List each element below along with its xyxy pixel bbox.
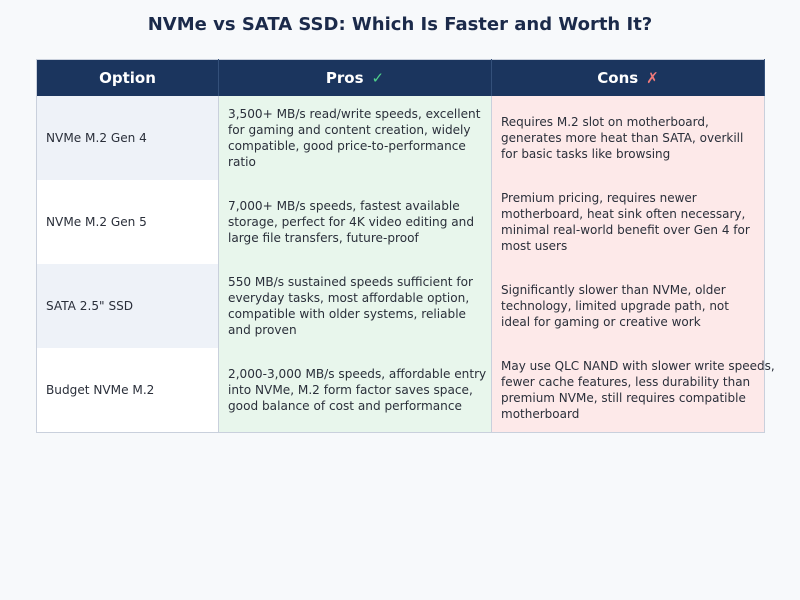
comparison table: 2,000-3,000 MB/s speeds, affordable entry — [228, 367, 486, 381]
comparison table: NVMe M.2 Gen 4 — [46, 131, 147, 145]
comparison table: ideal for gaming or creative work — [501, 315, 701, 329]
comparison table — [36, 59, 765, 432]
comparison table: technology, limited upgrade path, not — [501, 299, 729, 313]
comparison table: 550 MB/s sustained speeds sufficient for — [228, 275, 473, 289]
comparison table: Pros ✓ — [326, 69, 384, 87]
comparison table: fewer cache features, less durability than — [501, 375, 750, 389]
comparison table: Premium pricing, requires newer — [501, 191, 697, 205]
comparison table: Cons ✗ — [597, 69, 659, 87]
comparison table: for basic tasks like browsing — [501, 147, 670, 161]
title: NVMe vs SATA SSD: Which Is Faster and Worth It? — [148, 14, 652, 35]
comparison table: Significantly slower than NVMe, older — [501, 283, 726, 297]
comparison table: minimal real-world benefit over Gen 4 for — [501, 223, 750, 237]
comparison table: motherboard — [501, 407, 579, 421]
comparison table: 7,000+ MB/s speeds, fastest available — [228, 199, 460, 213]
comparison table: good balance of cost and performance — [228, 399, 462, 413]
comparison table: and proven — [228, 323, 297, 337]
comparison table: Budget NVMe M.2 — [46, 383, 154, 397]
comparison table: NVMe M.2 Gen 5 — [46, 215, 147, 229]
comparison table: compatible, good price-to-performance — [228, 139, 466, 153]
comparison table: generates more heat than SATA, overkill — [501, 131, 743, 145]
comparison table: into NVMe, M.2 form factor saves space, — [228, 383, 473, 397]
comparison table: everyday tasks, most affordable option, — [228, 291, 469, 305]
comparison table: ratio — [228, 155, 256, 169]
comparison table: May use QLC NAND with slower write speeds, — [501, 359, 775, 373]
comparison table: storage, perfect for 4K video editing and — [228, 215, 474, 229]
comparison table: for gaming and content creation, widely — [228, 123, 471, 137]
comparison table: large file transfers, future-proof — [228, 231, 419, 245]
comparison table: premium NVMe, still requires compatible — [501, 391, 746, 405]
comparison table: Requires M.2 slot on motherboard, — [501, 115, 709, 129]
comparison table: Option — [99, 69, 156, 87]
comparison table: SATA 2.5" SSD — [46, 299, 133, 313]
comparison table: 3,500+ MB/s read/write speeds, excellent — [228, 107, 480, 121]
comparison table: most users — [501, 239, 567, 253]
comparison table: motherboard, heat sink often necessary, — [501, 207, 745, 221]
comparison table: compatible with older systems, reliable — [228, 307, 466, 321]
